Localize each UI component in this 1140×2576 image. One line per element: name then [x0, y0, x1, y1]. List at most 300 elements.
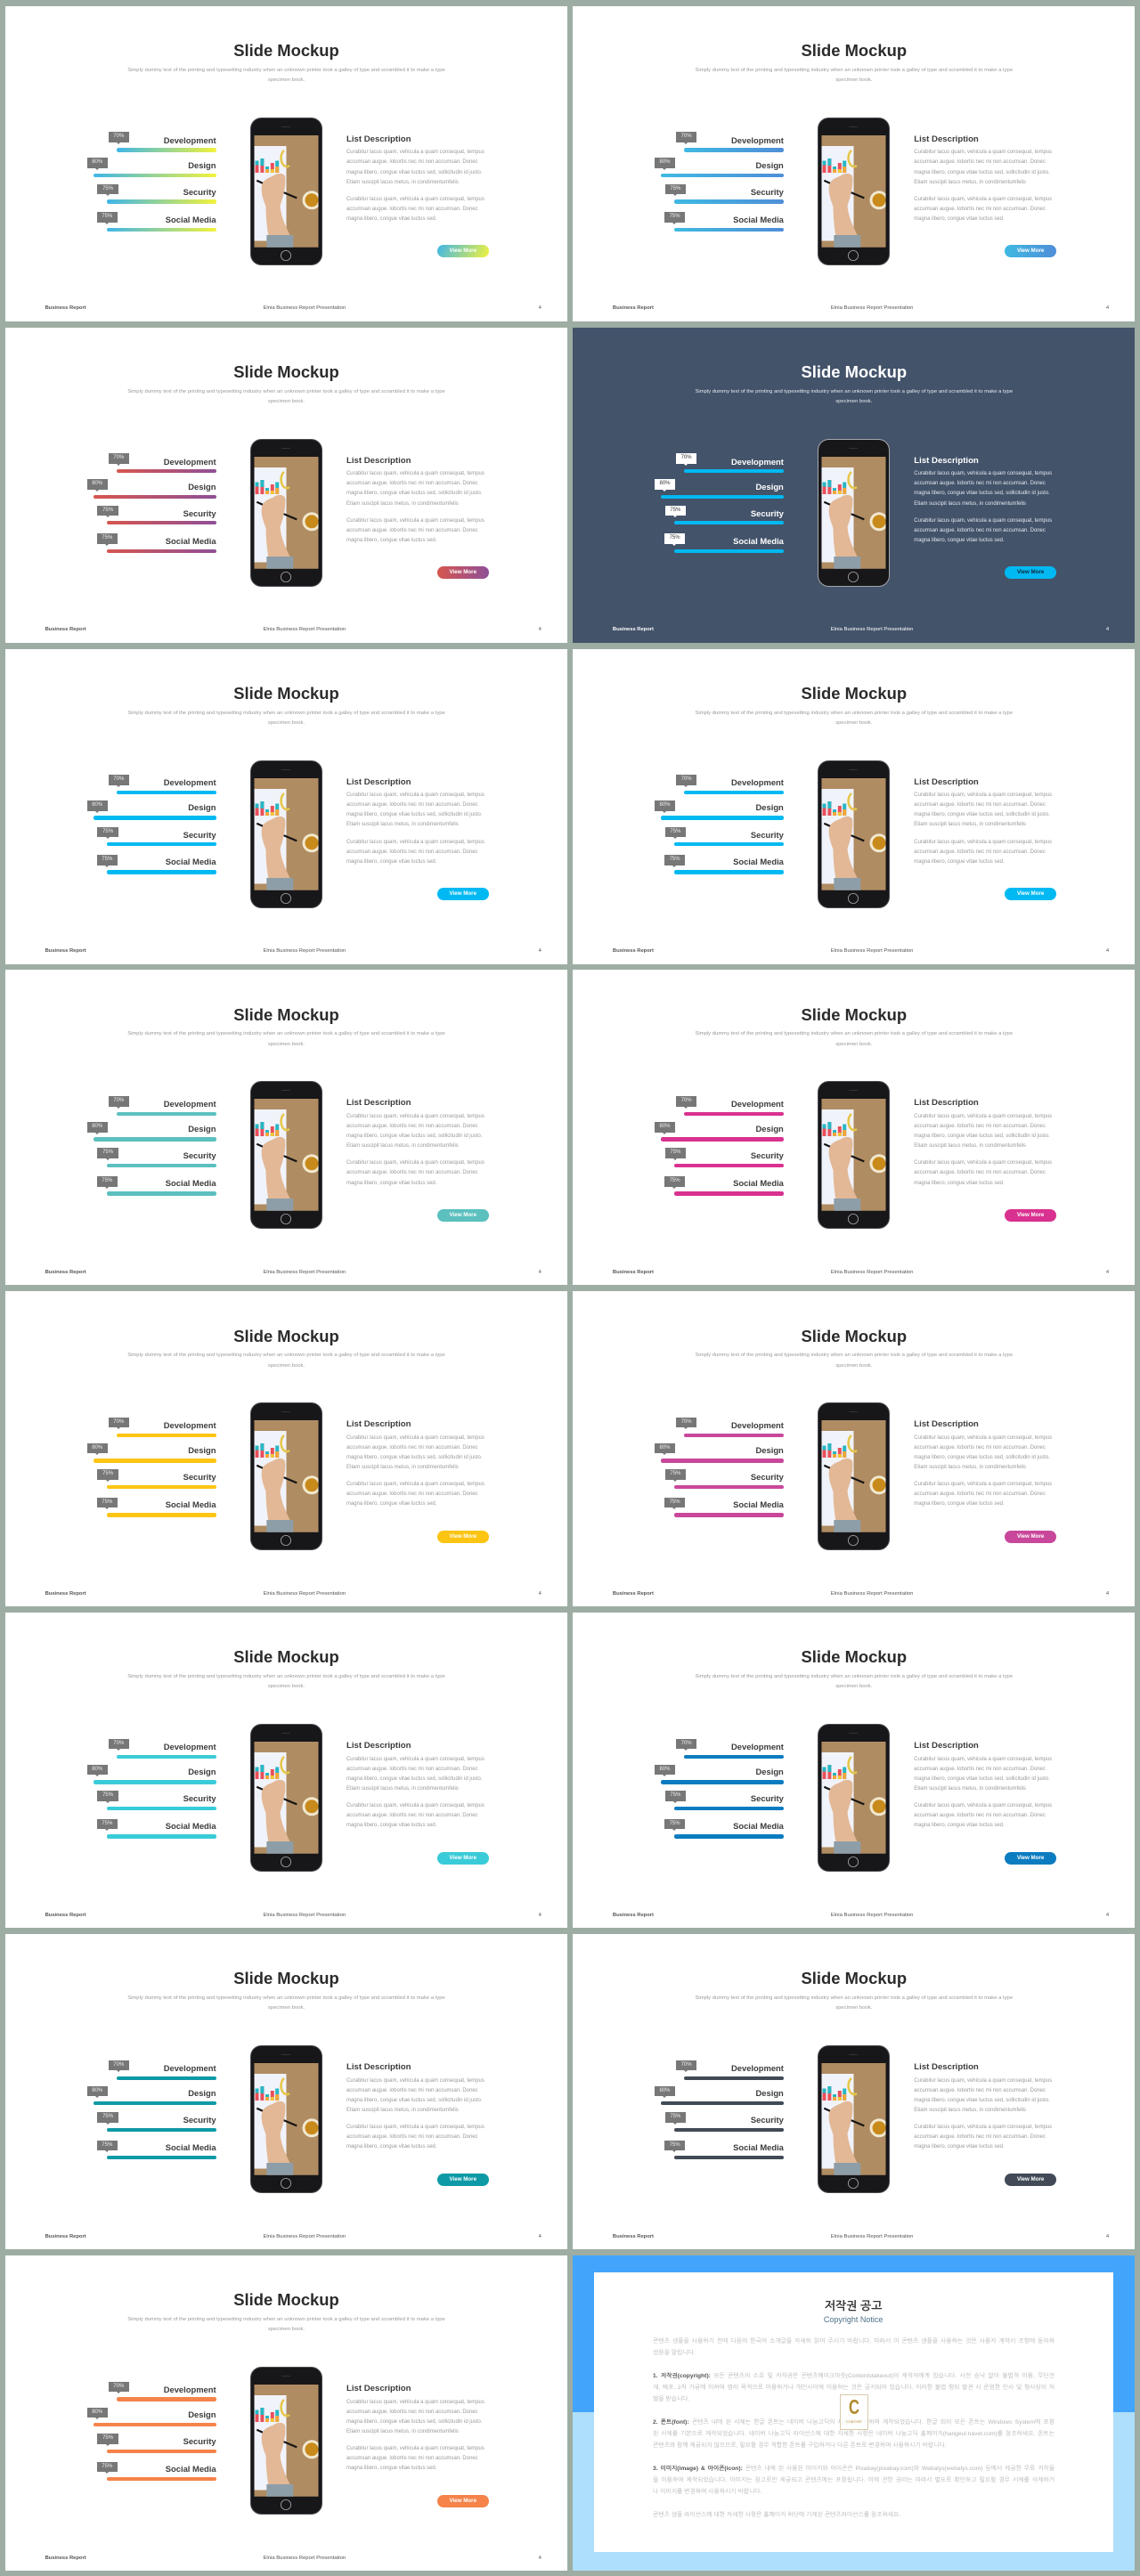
bar: Social Media: 75% [670, 1821, 680, 1826]
footer center: Elnia Business Report Presentation [264, 305, 346, 311]
icon: phone mockup [818, 118, 890, 265]
subtitle [5, 1029, 567, 1050]
panel: slide 1 gradient [5, 6, 567, 321]
subtitle [5, 2315, 567, 2336]
button [1005, 1852, 1056, 1865]
list description: Curabitur lacus quam, vehicula a quam consequat, tempus [914, 1757, 1052, 1762]
subtitle: Simply dummy text of the printing and typesetting industry when an unknown printer took a galley of type and scrambled it to make a type [695, 1674, 1013, 1679]
panel: slide 13 dark teal [5, 1934, 567, 2249]
page number: 4 [1106, 1270, 1109, 1275]
bar: Design [655, 1122, 784, 1142]
subtitle: Simply dummy text of the printing and typesetting industry when an unknown printer took a galley of type and scrambled it to make a type [695, 389, 1013, 394]
text: copyright clause: 재, 배포, 2차 가공에 의하여 영리 목적으로 이용하거나 개인사이에 이용하는 것은 금지되어 있습니다. 이러한 불법 행위 발견 시 준엄한 민사 및 형사상의 처 [653, 2385, 1054, 2391]
list description: accumsan augue. lobortis nec mi non accumsan. Donec [914, 159, 1046, 165]
list description: Etiam suscipit lacus metus, in condimentumfelis [914, 180, 1026, 185]
icon: phone mockup [250, 439, 322, 587]
subtitle [573, 1029, 1135, 1050]
bar: Development [676, 775, 784, 794]
bar: Security: 75% [102, 2435, 113, 2441]
list description: magna libero, congue vitae luctus sed. [346, 1181, 436, 1186]
title: Slide Mockup [802, 41, 907, 60]
bar: Security: Security [751, 1150, 784, 1160]
title: Slide Mockup [802, 684, 907, 703]
list description: Etiam suscipit lacus metus, in condimentumfelis [346, 180, 459, 185]
bar: Development [676, 1096, 784, 1116]
bar: Security [97, 506, 216, 524]
footer center: Elnia Business Report Presentation [264, 2234, 346, 2239]
bar: Design: 80% [659, 1445, 670, 1451]
list description: accumsan augue. lobortis nec mi non accumsan. Donec [346, 1813, 478, 1818]
footer left: Business Report [45, 627, 86, 632]
text: font clause: 2. 폰트(font): 콘텐츠 내에 된 서체는 한글 폰트는 네이버 나눔고딕의 사용을 허가하여 제작되었습니다. 한글 외의 모든 폰트는 Windows System에 포함 [653, 2419, 1054, 2426]
bar chart [653, 1416, 784, 1518]
list description: accumsan augue. lobortis nec mi non accumsan. Donec [914, 849, 1046, 855]
subtitle: specimen book. [268, 2327, 305, 2332]
panel: slide 9 yellow [5, 1291, 567, 1606]
title: Slide Mockup [233, 1327, 339, 1345]
footer left: Business Report [45, 305, 86, 311]
bar: Design [87, 2408, 216, 2427]
bar: Social Media [664, 855, 784, 874]
bar: Social Media: Social Media [166, 536, 216, 546]
bar chart [87, 132, 216, 232]
button: View More [450, 569, 476, 575]
bar: Design: 80% [92, 2088, 102, 2093]
list description [914, 134, 1052, 222]
icon: phone mockup [250, 760, 322, 908]
list description [346, 1098, 498, 1191]
list description: accumsan augue. lobortis nec mi non accumsan. Donec [346, 2134, 478, 2140]
list description: magna libero, congue vitae luctus sed. [914, 538, 1005, 543]
title: Slide Mockup [233, 1969, 339, 1987]
subtitle: Simply dummy text of the printing and typesetting industry when an unknown printer took a galley of type and scrambled it to make a type [695, 68, 1013, 73]
subtitle: Simply dummy text of the printing and typesetting industry when an unknown printer took a galley of type and scrambled it to make a type [695, 711, 1013, 716]
text: copyright clause [653, 2370, 1054, 2405]
list description: Curabitur lacus quam, vehicula a quam consequat, tempus [346, 2446, 484, 2451]
bar: Social Media: 75% [670, 2142, 680, 2148]
footer left: Business Report [45, 1591, 86, 1597]
list description: accumsan augue. lobortis nec mi non accumsan. Donec [346, 1170, 478, 1175]
subtitle: specimen book. [835, 720, 872, 726]
bar chart [86, 1094, 216, 1197]
list description: magna libero, congue vitae luctus sed, sollicitudin id justo. [346, 491, 482, 496]
bar: Development: 70% [113, 455, 124, 460]
panel: slide 8 magenta [573, 970, 1135, 1285]
list description: magna libero, congue vitae luctus sed, sollicitudin id justo. [914, 170, 1050, 175]
panel: slide 12 deep blue [573, 1613, 1135, 1928]
button [437, 888, 489, 900]
list description: accumsan augue. lobortis nec mi non accumsan. Donec [914, 2134, 1046, 2140]
bar: Social Media [664, 212, 784, 232]
list description: Curabitur lacus quam, vehicula a quam consequat, tempus [346, 792, 484, 798]
bar: Security: 75% [670, 1150, 680, 1155]
footer center: Elnia Business Report Presentation [264, 627, 346, 632]
list description: List Description [346, 2062, 411, 2072]
list description: magna libero, congue vitae luctus sed, sollicitudin id justo. [346, 1134, 482, 1139]
bar: Design: Design [756, 1767, 784, 1776]
list description: accumsan augue. lobortis nec mi non accumsan. Donec [914, 1124, 1046, 1129]
list description: accumsan augue. lobortis nec mi non accumsan. Donec [914, 802, 1046, 808]
bar: Development [109, 1096, 216, 1116]
list description: accumsan augue. lobortis nec mi non accumsan. Donec [346, 207, 478, 212]
icon: watermark logo: CONTENT [846, 2420, 862, 2424]
bar: Security: 75% [670, 186, 680, 191]
list description [914, 1098, 1065, 1191]
page number: 4 [1106, 1913, 1109, 1918]
panel: slide 10 pink [573, 1291, 1135, 1606]
footer center: Elnia Business Report Presentation [831, 948, 913, 954]
list description: Curabitur lacus quam, vehicula a quam consequat, tempus [346, 1160, 484, 1166]
bar: Security: 75% [102, 1150, 113, 1155]
list description [346, 134, 484, 222]
bar: Development [676, 453, 784, 473]
panel: slide 3 red [5, 328, 567, 643]
bar: Social Media: Social Media [733, 215, 784, 224]
bar: Security: 75% [102, 1471, 113, 1476]
button: View More [450, 1533, 476, 1540]
bar: Social Media: 75% [102, 1499, 112, 1505]
footer left: Business Report [613, 1270, 654, 1275]
bar: Security: Security [183, 2436, 216, 2446]
footer left: Business Report [613, 948, 654, 954]
list description: magna libero, congue vitae luctus sed, sollicitudin id justo. [914, 1776, 1050, 1782]
title: Slide Mockup [233, 684, 339, 703]
text: image clause [653, 2463, 1054, 2498]
bar: Security [97, 1469, 216, 1490]
list description: Etiam suscipit lacus metus, in condimentumfelis [346, 2108, 459, 2113]
bar: Design: 80% [92, 159, 102, 165]
list description: Curabitur lacus quam, vehicula a quam consequat, tempus [914, 197, 1052, 202]
subtitle [573, 1994, 1135, 2014]
bar: Design: 80% [92, 1124, 102, 1129]
text: font clause [653, 2417, 1054, 2451]
bar: Social Media [97, 2141, 216, 2160]
list description: magna libero, congue vitae luctus sed, sollicitudin id justo. [914, 812, 1050, 817]
list description: accumsan augue. lobortis nec mi non accumsan. Donec [914, 1170, 1046, 1175]
text: intro: 콘텐츠 샘플을 사용하기 전에 다음의 한국어 소개글을 자세히 읽어 주시기 바랍니다. 따라서 이 콘텐츠 샘플을 사용하는 것은 사용자 계약서 조항에 동의하 [653, 2338, 1054, 2344]
button [437, 1209, 489, 1222]
bar chart [86, 1737, 216, 1840]
list description: Curabitur lacus quam, vehicula a quam consequat, tempus [346, 1803, 484, 1808]
bar: Social Media: Social Media [733, 1499, 784, 1509]
title: Slide Mockup [233, 1005, 339, 1024]
bar: Design: Design [188, 1767, 216, 1776]
icon: phone mockup [818, 1081, 890, 1229]
bar chart [653, 773, 784, 876]
bar: Design: 80% [92, 1445, 102, 1451]
list description: magna libero, congue vitae luctus sed. [914, 1181, 1005, 1186]
bar: Social Media: 75% [670, 1178, 680, 1183]
list description: Curabitur lacus quam, vehicula a quam consequat, tempus [914, 518, 1052, 524]
subtitle [695, 389, 1013, 404]
bar: Security: 75% [102, 186, 113, 191]
list description: Etiam suscipit lacus metus, in condimentumfelis [346, 822, 459, 827]
bar chart [86, 1416, 216, 1518]
page number: 4 [1106, 627, 1109, 632]
panel: slide 7 teal [5, 970, 567, 1285]
subtitle: specimen book. [268, 77, 305, 83]
button [1005, 245, 1056, 257]
page number: 4 [539, 627, 542, 632]
bar: Social Media: 75% [670, 535, 680, 540]
subtitle [5, 1351, 567, 1371]
bar: Security [665, 506, 784, 524]
list description: magna libero, congue vitae luctus sed. [346, 2144, 436, 2149]
bar: Development: 70% [113, 2062, 124, 2068]
bar chart [653, 1737, 784, 1840]
button: View More [450, 2498, 476, 2504]
page number: 4 [1106, 305, 1109, 311]
footer center: Elnia Business Report Presentation [264, 948, 346, 954]
bar: Development: 70% [113, 134, 124, 139]
bar: Design: Design [188, 2409, 216, 2419]
list description: magna libero, congue vitae luctus sed. [346, 216, 436, 222]
subtitle: Simply dummy text of the printing and typesetting industry when an unknown printer took a galley of type and scrambled it to make a type [127, 68, 445, 73]
bar: Design: 80% [659, 802, 670, 808]
text: copyright clause: 1. 저작권(copyright): 모든 콘텐츠의 소유 및 저작권은 콘텐츠메이크아웃(Contentstakeout)의 제작자에게 있습니다. 사전 승낙 없이 불법적 이용, 무단전 [653, 2373, 1054, 2379]
footer center: Elnia Business Report Presentation [831, 1913, 913, 1918]
subtitle: specimen book. [268, 1363, 305, 1369]
bar: Development [109, 453, 216, 473]
bar: Design: Design [756, 1124, 784, 1134]
bar: Development: Development [731, 1099, 784, 1109]
title: Slide Mockup [233, 41, 339, 60]
bar: Security: Security [751, 1793, 784, 1803]
list description: magna libero, congue vitae luctus sed, sollicitudin id justo. [914, 1134, 1050, 1139]
list description: Etiam suscipit lacus metus, in condimentumfelis [346, 1465, 459, 1470]
bar: Security: Security [183, 1472, 216, 1482]
list description: Curabitur lacus quam, vehicula a quam consequat, tempus [914, 1482, 1052, 1487]
list description: List Description [346, 1741, 411, 1751]
bar: Development [109, 2382, 216, 2401]
page number: 4 [539, 2234, 542, 2239]
bar: Security [97, 1791, 216, 1810]
button: View More [450, 2176, 476, 2182]
bar: Social Media: 75% [102, 857, 112, 862]
bar: Security [97, 184, 216, 204]
subtitle: Simply dummy text of the printing and typesetting industry when an unknown printer took a galley of type and scrambled it to make a type [127, 1995, 445, 2001]
panel: slide 4 dark [573, 328, 1135, 643]
list description: magna libero, congue vitae luctus sed, sollicitudin id justo. [346, 2419, 482, 2425]
footer left: Business Report [613, 1913, 654, 1918]
list description: accumsan augue. lobortis nec mi non accumsan. Donec [346, 2088, 478, 2093]
text: copyright clause: 벌을 받습니다. [653, 2396, 689, 2402]
bar: Development: Development [164, 457, 216, 467]
panel: slide 5 cyan [5, 648, 567, 963]
subtitle: specimen book. [835, 1042, 872, 1047]
bar: Development: 70% [113, 1419, 124, 1425]
bar: Social Media [97, 1819, 216, 1839]
bar: Design [655, 800, 784, 820]
bar: Security [665, 1791, 784, 1810]
list description: accumsan augue. lobortis nec mi non accumsan. Donec [914, 528, 1046, 533]
list description [914, 1741, 1065, 1834]
list description: Curabitur lacus quam, vehicula a quam consequat, tempus [346, 1757, 484, 1762]
list description: List Description [346, 456, 411, 466]
subtitle: specimen book. [835, 399, 872, 404]
bar: Development: 70% [681, 2062, 692, 2068]
button [437, 2174, 489, 2186]
bar: Development: Development [731, 2063, 784, 2073]
bar chart [86, 2059, 216, 2161]
list description: Etiam suscipit lacus metus, in condimentumfelis [914, 822, 1026, 827]
list description: accumsan augue. lobortis nec mi non accumsan. Donec [914, 1491, 1046, 1497]
bar: Design: Design [188, 1124, 216, 1134]
bar: Security: Security [183, 1793, 216, 1803]
list description: List Description [914, 134, 979, 144]
bar: Design [87, 1765, 216, 1784]
footer center: Elnia Business Report Presentation [831, 1591, 913, 1597]
button [1005, 1531, 1056, 1543]
bar: Design: Design [756, 482, 784, 492]
bar: Security [665, 2112, 784, 2132]
button: View More [1017, 1212, 1044, 1218]
bar: Development [676, 1739, 784, 1759]
list description: Curabitur lacus quam, vehicula a quam consequat, tempus [914, 1114, 1052, 1119]
bar: Social Media [97, 855, 216, 874]
bar: Social Media: 75% [670, 857, 680, 862]
list description: magna libero, congue vitae luctus sed, sollicitudin id justo. [346, 2098, 482, 2103]
subtitle: Simply dummy text of the printing and typesetting industry when an unknown printer took a galley of type and scrambled it to make a type [127, 1353, 445, 1358]
list description: Curabitur lacus quam, vehicula a quam consequat, tempus [346, 1114, 484, 1119]
list description: magna libero, congue vitae luctus sed. [346, 859, 436, 865]
list description: List Description [346, 134, 411, 144]
list description: accumsan augue. lobortis nec mi non accumsan. Donec [346, 802, 478, 808]
subtitle: Simply dummy text of the printing and typesetting industry when an unknown printer took a galley of type and scrambled it to make a type [695, 1031, 1013, 1036]
bar: Development: 70% [681, 776, 692, 782]
bar: Development: Development [731, 1420, 784, 1430]
footer left: Business Report [613, 1591, 654, 1597]
list description: magna libero, congue vitae luctus sed. [346, 1501, 436, 1507]
list description: magna libero, congue vitae luctus sed. [346, 2466, 436, 2471]
bar: Development: Development [164, 135, 216, 145]
list description: List Description [346, 1419, 411, 1429]
text: font clause: 된 서체를 기본으로 제작되었습니다. 네이버 나눔고딕 라이선스에 대한 자세한 사항은 네이버 나눔고딕 홈페이지(hangeul.naver.com)를 참조하세요. 폰트는 [653, 2431, 1054, 2437]
bar: Design [655, 2086, 784, 2106]
bar: Social Media: Social Media [733, 1821, 784, 1831]
bar: Social Media: Social Media [166, 215, 216, 224]
bar: Design: 80% [92, 2409, 102, 2415]
bar: Security: 75% [102, 828, 113, 833]
footer left: Business Report [45, 1913, 86, 1918]
list description: Etiam suscipit lacus metus, in condimentumfelis [914, 1143, 1026, 1149]
list description: Curabitur lacus quam, vehicula a quam consequat, tempus [914, 839, 1052, 844]
button [437, 1852, 489, 1865]
bar: Social Media [97, 533, 216, 553]
bar: Development [109, 775, 216, 794]
bar: Design [87, 158, 216, 177]
bar: Social Media: 75% [102, 1821, 112, 1826]
button: View More [1017, 890, 1044, 897]
subtitle [573, 1351, 1135, 1371]
footer left: Business Report [45, 948, 86, 954]
panel: copyright background [573, 2255, 1135, 2571]
title: Slide Mockup [233, 2290, 339, 2309]
list description: Curabitur lacus quam, vehicula a quam consequat, tempus [346, 2125, 484, 2130]
bar: Design: 80% [659, 2088, 670, 2093]
bar chart [87, 453, 216, 553]
bar: Security: 75% [670, 828, 680, 833]
bar chart [655, 453, 784, 553]
bar: Development: 70% [113, 1098, 124, 1103]
bar: Social Media: Social Media [733, 2142, 784, 2152]
list description: magna libero, congue vitae luctus sed, sollicitudin id justo. [914, 1455, 1050, 1460]
panel: copyright notice [593, 2272, 1113, 2552]
bar: Development: 70% [113, 1741, 124, 1746]
bar: Security: Security [751, 1472, 784, 1482]
subtitle: specimen book. [835, 77, 872, 83]
icon: phone mockup [250, 2367, 322, 2515]
bar: Social Media: 75% [102, 535, 112, 540]
bar: Social Media: Social Media [166, 2464, 216, 2474]
bar: Social Media [97, 1498, 216, 1517]
bar: Social Media: Social Media [166, 857, 216, 866]
bar: Social Media: 75% [102, 2464, 112, 2469]
footer center: Elnia Business Report Presentation [831, 627, 913, 632]
bar: Design: Design [756, 802, 784, 812]
bar: Development: Development [731, 135, 784, 145]
list description: Curabitur lacus quam, vehicula a quam consequat, tempus [346, 2078, 484, 2084]
list description: accumsan augue. lobortis nec mi non accumsan. Donec [346, 481, 478, 486]
list description: List Description [346, 776, 411, 787]
bar: Security: Security [751, 508, 784, 518]
icon: phone mockup [818, 1724, 890, 1872]
bar: Social Media: Social Media [733, 536, 784, 546]
bar: Social Media [97, 2462, 216, 2482]
icon: phone mockup [250, 118, 322, 265]
bar: Security: 75% [102, 508, 113, 513]
list description: magna libero, congue vitae luctus sed, sollicitudin id justo. [346, 812, 482, 817]
button: View More [450, 1212, 476, 1218]
bar: Security: 75% [670, 1471, 680, 1476]
title: Slide Mockup [802, 1647, 907, 1666]
heading: Korean title: 저작권 공고 [825, 2299, 882, 2312]
list description [914, 456, 1052, 543]
subtitle: Simply dummy text of the printing and typesetting industry when an unknown printer took a galley of type and scrambled it to make a type [127, 711, 445, 716]
title: Slide Mockup [233, 1647, 339, 1666]
button: View More [450, 1855, 476, 1861]
list description: accumsan augue. lobortis nec mi non accumsan. Donec [346, 849, 478, 855]
bar: Design: Design [188, 160, 216, 170]
bar: Security: Security [751, 187, 784, 197]
bar: Security [97, 2112, 216, 2132]
list description: List Description [914, 1419, 979, 1429]
subtitle: Simply dummy text of the printing and typesetting industry when an unknown printer took a galley of type and scrambled it to make a type [127, 1031, 445, 1036]
list description: magna libero, congue vitae luctus sed. [914, 2144, 1005, 2149]
page number: 4 [539, 1913, 542, 1918]
bar: Social Media [97, 212, 216, 232]
bar: Security [665, 1469, 784, 1490]
bar: Social Media: 75% [670, 1499, 680, 1505]
subtitle: specimen book. [268, 399, 305, 404]
text: intro: 셨음을 알립니다. [653, 2350, 696, 2356]
bar: Development: 70% [681, 1741, 692, 1746]
footer center: Elnia Business Report Presentation [264, 1591, 346, 1597]
bar: Security: 75% [102, 1792, 113, 1798]
panel: slide 14 charcoal [573, 1934, 1135, 2249]
bar: Development [109, 2060, 216, 2080]
footer center: Elnia Business Report Presentation [831, 2234, 913, 2239]
bar: Security: 75% [102, 2114, 113, 2119]
bar: Design: Design [188, 1445, 216, 1455]
subtitle [127, 68, 445, 83]
icon: phone mockup [818, 439, 890, 587]
list description: magna libero, congue vitae luctus sed. [346, 1823, 436, 1828]
bar: Design: Design [756, 160, 784, 170]
bar: Design: Design [188, 802, 216, 812]
bar: Security [665, 826, 784, 847]
icon: phone mockup [250, 1724, 322, 1872]
